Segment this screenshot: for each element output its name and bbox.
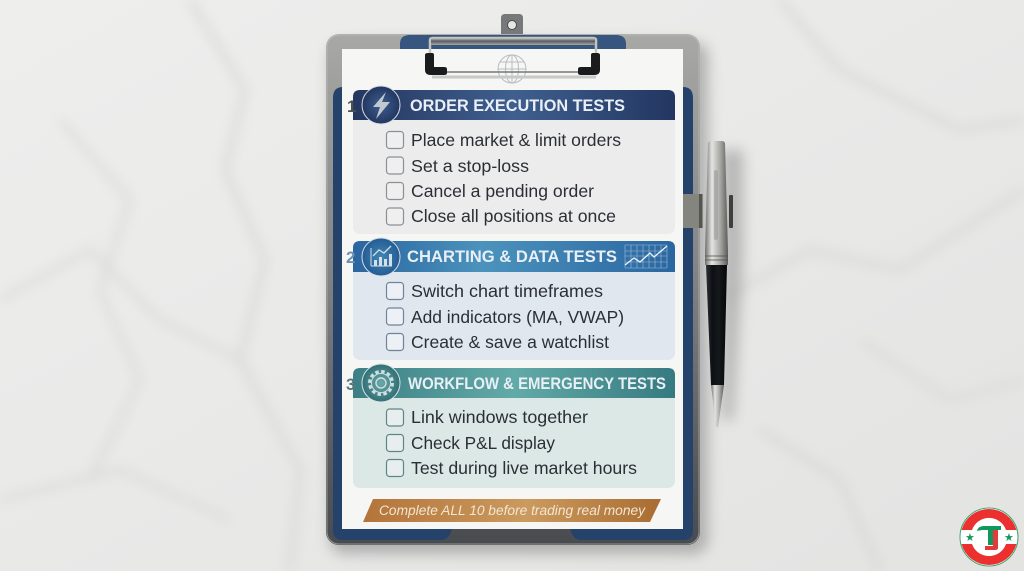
header bar xyxy=(353,90,675,120)
checklist: Close all positions at once xyxy=(411,206,616,226)
heading: ORDER EXECUTION TESTS xyxy=(410,96,625,115)
T monogram xyxy=(977,526,1001,545)
logo badge xyxy=(960,508,1018,566)
header bar xyxy=(353,241,675,272)
checklist: Check P&L display xyxy=(411,433,555,453)
callout banner: Complete ALL 10 before trading real money xyxy=(379,503,646,518)
clipboard xyxy=(326,14,708,554)
number 3: 3 xyxy=(346,375,355,394)
board body xyxy=(326,34,700,545)
cap xyxy=(705,141,728,252)
panel: workflow and emergency tests xyxy=(346,364,675,488)
clip shadow xyxy=(432,76,596,78)
pen xyxy=(683,141,743,427)
pen clip xyxy=(729,195,733,228)
checklist: Test during live market hours xyxy=(411,458,637,478)
panel: order execution tests xyxy=(347,86,675,234)
metal clip xyxy=(425,38,600,77)
blue backing xyxy=(333,87,693,540)
checklist xyxy=(386,281,624,352)
logo badge: ★ xyxy=(1004,532,1014,544)
checklist xyxy=(386,407,637,478)
stars: ★ xyxy=(965,532,975,544)
icon: lightning xyxy=(362,86,400,124)
tip xyxy=(711,385,724,427)
icon: gear xyxy=(362,364,400,402)
checklist: Place market & limit orders xyxy=(411,130,621,150)
icon: bar chart xyxy=(362,238,400,276)
number 1: 1 xyxy=(347,97,356,116)
number 2: 2 xyxy=(346,248,355,267)
checklist: Cancel a pending order xyxy=(411,181,594,201)
pen shadow xyxy=(722,150,743,420)
icon: line chart grid xyxy=(625,245,667,268)
board shadow xyxy=(330,42,708,554)
checklist: Link windows together xyxy=(411,407,588,427)
panel: charting and data tests xyxy=(346,238,675,360)
heading: CHARTING & DATA TESTS xyxy=(407,247,617,266)
checklist: Set a stop-loss xyxy=(411,156,529,176)
side clip on board xyxy=(683,194,703,228)
heading: WORKFLOW & EMERGENCY TESTS xyxy=(408,374,666,393)
icon: globe watermark xyxy=(498,55,526,83)
callout banner xyxy=(363,499,661,522)
top blue tab xyxy=(400,35,626,50)
checklist: Switch chart timeframes xyxy=(411,281,603,301)
band xyxy=(705,252,728,265)
checklist: Add indicators (MA, VWAP) xyxy=(411,307,624,327)
checklist: Create & save a watchlist xyxy=(411,332,609,352)
board tab xyxy=(501,14,523,34)
barrel xyxy=(706,265,727,385)
checklist xyxy=(386,130,621,226)
header bar xyxy=(353,368,675,398)
paper xyxy=(342,49,683,529)
